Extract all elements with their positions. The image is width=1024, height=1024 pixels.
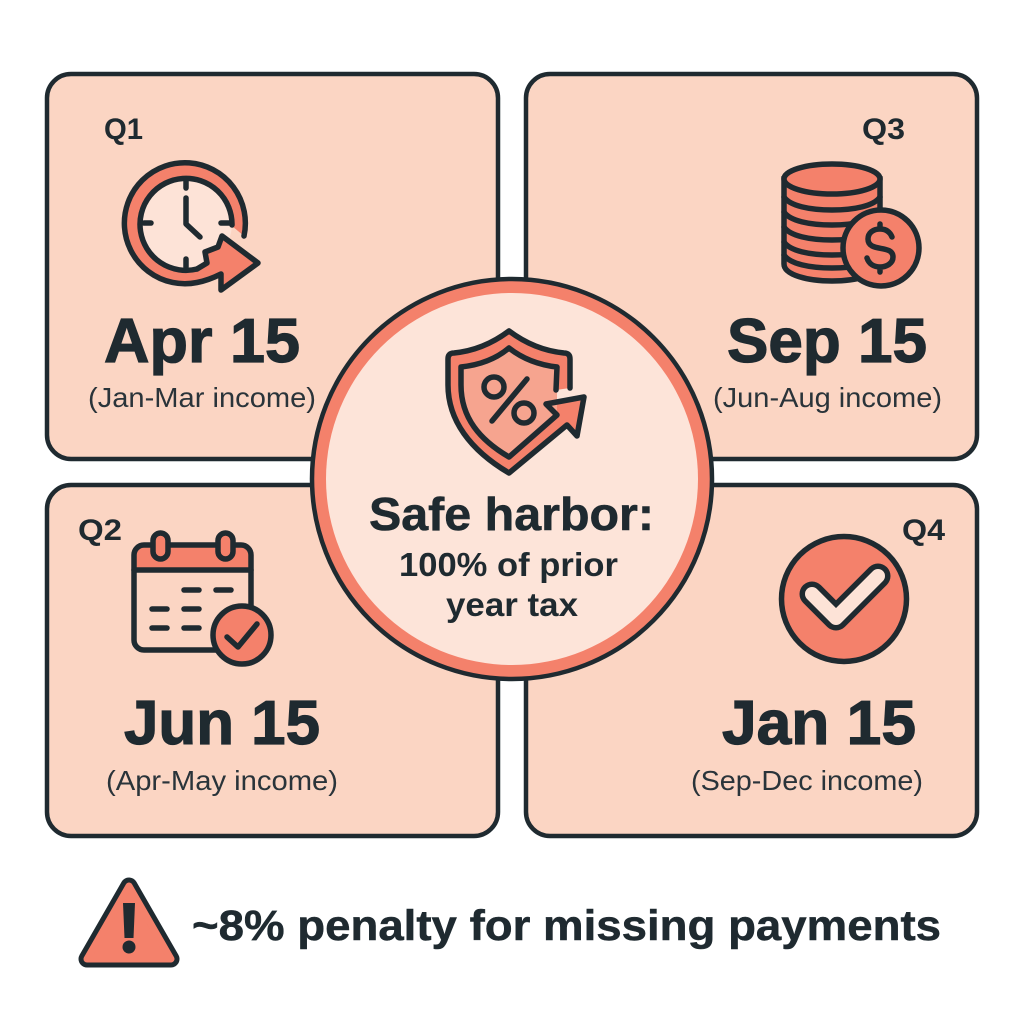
panel: Q4 bbox=[526, 485, 977, 836]
penalty text: ~8% penalty for missing payments bbox=[192, 902, 941, 950]
heading: safe harbor: Safe harbor: bbox=[369, 488, 654, 540]
date: Sep 15: Sep 15 bbox=[727, 307, 927, 376]
icon: shield with percent and arrow bbox=[448, 331, 584, 473]
Q2 label: Q2 bbox=[78, 514, 122, 547]
panel: Q2 bbox=[47, 485, 498, 836]
date: Jan 15: Jan 15 bbox=[722, 689, 916, 758]
icon: calendar with check bbox=[134, 533, 271, 664]
text: year tax: year tax bbox=[446, 586, 579, 623]
date: Jun 15: Jun 15 bbox=[124, 689, 320, 758]
panel: safe harbor circle bbox=[312, 279, 712, 679]
icon: check circle bbox=[782, 536, 906, 662]
penalty callout bbox=[87, 886, 941, 959]
Q3 label: Q3 bbox=[862, 113, 905, 146]
panel: Q1 bbox=[47, 74, 498, 459]
Q4 label: Q4 bbox=[902, 514, 945, 547]
Q1 label: Q1 bbox=[104, 113, 143, 146]
income range: Jun-Aug: (Jun-Aug income) bbox=[713, 382, 942, 413]
income range: Jan-Mar: (Jan-Mar income) bbox=[88, 382, 316, 413]
panel: Q3 bbox=[526, 74, 977, 459]
income range: Apr-May: (Apr-May income) bbox=[106, 765, 338, 796]
income range: Sep-Dec: (Sep-Dec income) bbox=[691, 765, 923, 796]
icon: clock with arrow bbox=[124, 163, 258, 290]
icon: coin stack with dollar bbox=[784, 164, 919, 286]
icon: warning triangle bbox=[87, 886, 171, 959]
date: Apr 15: Apr 15 bbox=[104, 307, 300, 376]
text: 100% of prior: 100% of prior bbox=[399, 546, 618, 583]
